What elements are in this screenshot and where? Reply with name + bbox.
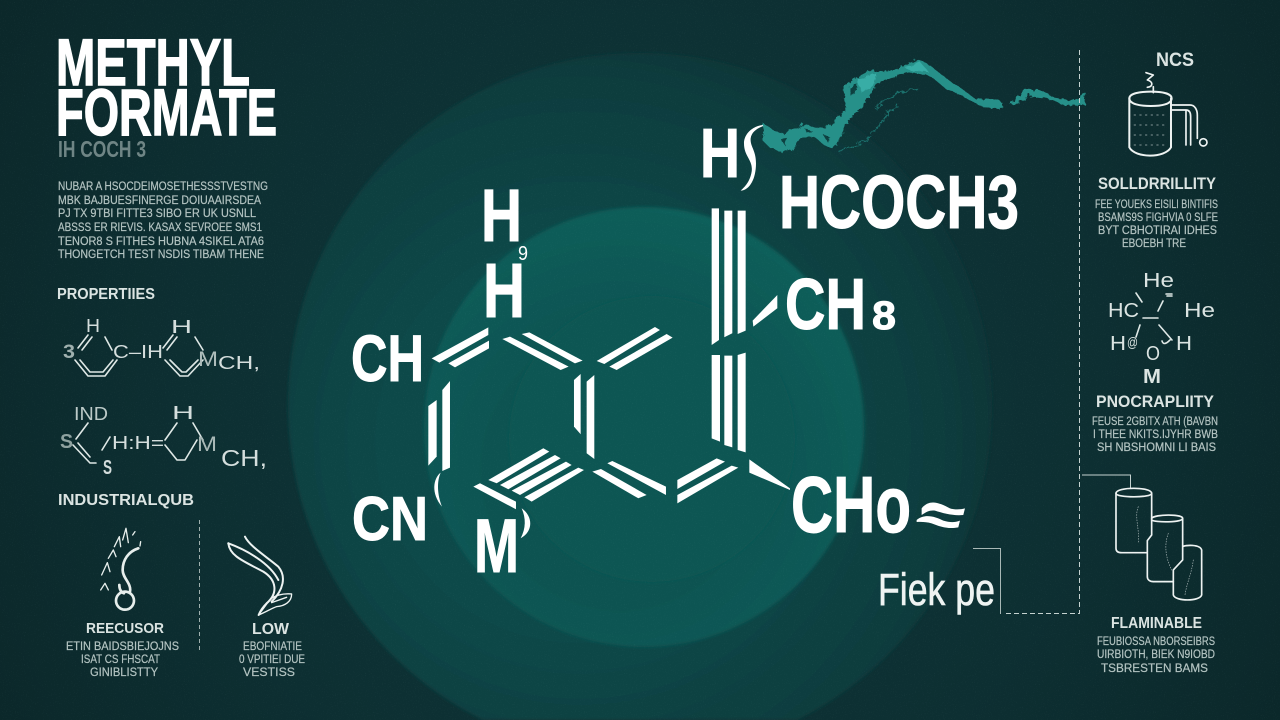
label: precursor: GINIBLISTTY: [90, 667, 158, 679]
main molecule: ring bonds: [428, 327, 673, 538]
label: Fiek pe: Fiek pe: [878, 564, 995, 615]
title: METHYL: [56, 25, 250, 99]
label: solubility: FEE YOUEKS EISILI BINTIFIS: [1095, 199, 1218, 211]
divider: [198, 520, 200, 650]
structure: hydroxyl diagram: He: [1184, 300, 1215, 322]
label: solubility: BSAMS9S FIGHVIA 0 SLFE: [1098, 212, 1218, 224]
molecule labels: CN: [352, 485, 428, 554]
structure 1: CH,: [218, 353, 260, 373]
molecule labels: [351, 114, 740, 589]
label: precursor: REECUSOR: [86, 620, 164, 637]
molecule labels: H: [483, 248, 525, 334]
leader to cylinders: [1082, 475, 1130, 488]
label: precursor: [66, 620, 179, 679]
intro paragraph: MBK BAJBUESFINERGE DOIUAAIRSDEA: [58, 195, 261, 207]
label: flammable: FLAMINABLE: [1111, 615, 1202, 632]
label: solubility: [1095, 174, 1218, 250]
side chain bonds upper: [712, 125, 777, 345]
molecule labels: H: [700, 114, 740, 192]
structure: hydroxyl diagram: H: [1110, 333, 1126, 355]
structure: hydroxyl diagram: HC: [1108, 300, 1139, 322]
label: flammable: [1097, 615, 1215, 675]
label: solubility: EBOEBH TRE: [1122, 238, 1186, 250]
label: precursor: ISAT CS FHSCAT: [81, 654, 160, 666]
title: FORMATE: [56, 75, 277, 149]
icon: cylinders: [1116, 488, 1202, 600]
intro paragraph: NUBAR A HSOCDEIMOSETHESSSTVESTNG: [58, 181, 268, 193]
molecule labels: CH: [351, 321, 424, 395]
label: low: [239, 621, 305, 679]
label: pyrophoricity: PNOCRAPLIITY: [1096, 392, 1215, 411]
molecule labels: 9: [518, 243, 528, 265]
heading: industrial: INDUSTRIALQUB: [58, 492, 194, 509]
structure: hydroxyl diagram: [1108, 270, 1215, 388]
structure: hydroxyl diagram: O: [1146, 343, 1160, 365]
intro paragraph: PJ TX 9TBI FITTE3 SIBO ER UK USNLL: [58, 208, 257, 220]
label: low: EBOFNIATIE: [243, 641, 302, 653]
structure: hydroxyl diagram: @: [1127, 334, 1138, 350]
label: flammable: TSBRESTEN BAMS: [1101, 663, 1208, 675]
structure 2: IND: [74, 404, 108, 424]
structure: hydroxyl diagram: M: [1143, 366, 1161, 388]
structure 2: H: [172, 403, 194, 423]
title: [56, 25, 277, 149]
label: pyrophoricity: FEUSE 2GBITX ATH (BAVBN: [1092, 416, 1218, 428]
teal smoke wisp: [763, 59, 1085, 152]
structure 2: [60, 403, 267, 479]
label: pyrophoricity: I THEE NKITS.IJYHR BWB: [1093, 429, 1218, 441]
structure 2: H:H=: [112, 433, 164, 453]
side chain bonds lower: [677, 353, 965, 528]
structure 1: C–IH: [113, 342, 163, 362]
label: low: 0 VPITIEI DUE: [239, 654, 305, 666]
label: flammable: FEUBIOSSA NBORSEIBRS: [1097, 636, 1215, 648]
label: flammable: UIRBIOTH, BIEK N9IOBD: [1097, 649, 1215, 661]
dashed connector: [1006, 50, 1080, 614]
structure 1: 3: [63, 342, 75, 363]
label: CHo: CHo: [791, 460, 911, 549]
icon: beaker mug: [1129, 73, 1207, 156]
label: solubility: BYT CBHOTIRAI IDHES: [1098, 225, 1217, 237]
label: CH8: CH: [785, 265, 866, 345]
structure 1: H: [171, 317, 192, 337]
bracket connector: [973, 548, 1000, 614]
structure 2: CH,: [221, 445, 267, 471]
label: CH8: 8: [872, 294, 896, 338]
structure 1: [63, 316, 260, 376]
structure 2: M: [197, 433, 217, 456]
formula callout: HCOCH3: [779, 160, 1019, 244]
formula subtitle: IH COCH 3: [58, 136, 146, 162]
icon: precursor: [101, 528, 141, 610]
label: precursor: ETIN BAIDSBIEJOJNS: [66, 641, 179, 653]
structure 1: M: [198, 348, 218, 371]
label: low: VESTISS: [243, 667, 295, 679]
intro paragraph: TENOR8 S FITHES HUBNA 4SIKEL ATA6: [58, 236, 264, 248]
structure: hydroxyl diagram: H: [1176, 333, 1192, 355]
icon: leaf swirl: [228, 537, 292, 615]
label: pyrophoricity: SH NBSHOMNI LI BAIS: [1097, 442, 1216, 454]
label: NCS: NCS: [1156, 50, 1194, 71]
structure 1: H: [86, 316, 100, 336]
structure 2: S: [103, 457, 112, 479]
label: solubility: SOLLDRRILLITY: [1098, 174, 1217, 193]
intro paragraph: THONGETCH TEST NSDIS TIBAM THENE: [58, 249, 264, 261]
structure: hydroxyl diagram: He: [1143, 270, 1174, 292]
intro paragraph: [58, 181, 268, 261]
structure 2: S: [60, 431, 73, 453]
heading: properties: PROPERTIIES: [57, 286, 155, 303]
molecule labels: H: [481, 174, 522, 257]
label: low: LOW: [252, 621, 290, 638]
molecule labels: M: [474, 504, 519, 589]
label: pyrophoricity: [1092, 392, 1218, 454]
intro paragraph: ABSSS ER RIEVIS. KASAX SEVROEE SMS1: [58, 222, 262, 234]
